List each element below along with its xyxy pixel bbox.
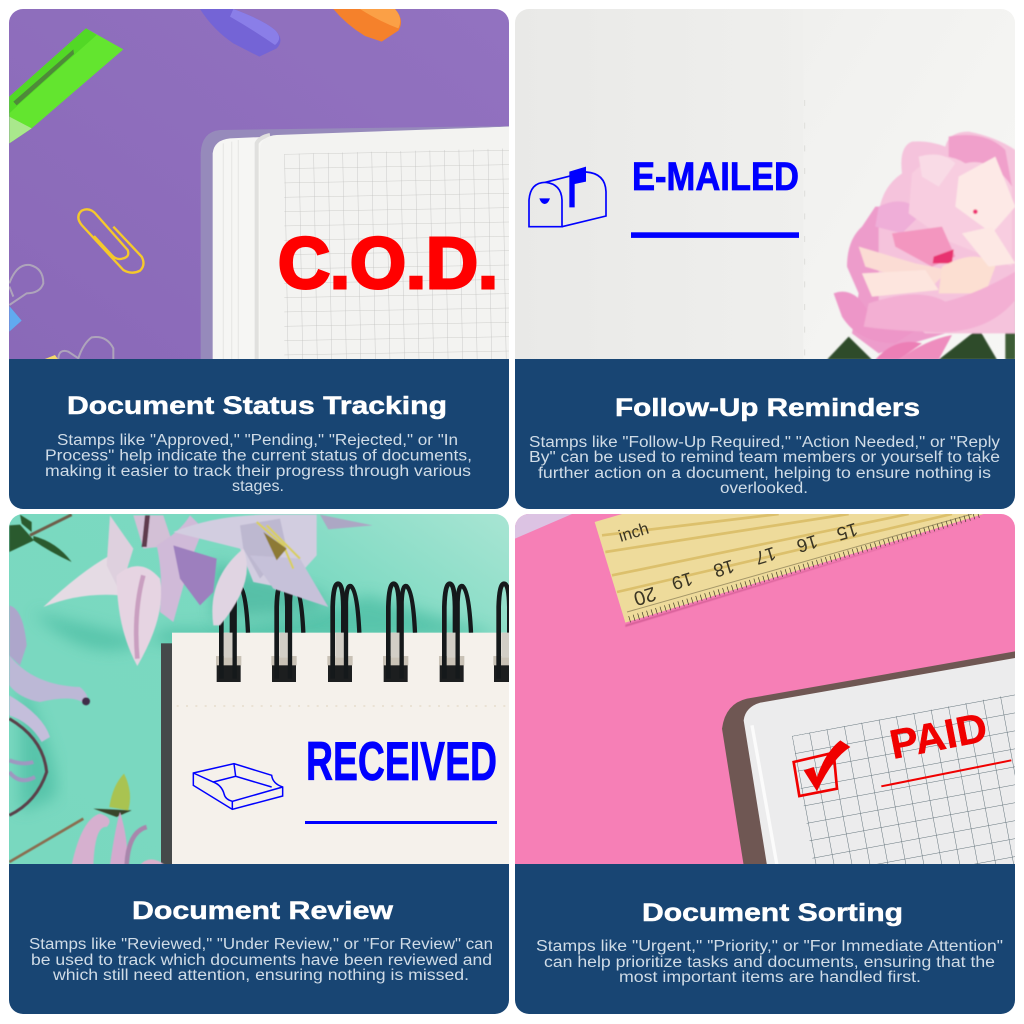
stamp text: C.O.D.: C.O.D. [278, 224, 498, 304]
icon: red check box [794, 740, 850, 796]
body text: Stamps like "Approved," "Pending," "Rejected," or "In [57, 432, 458, 449]
body text: Process" help indicate the current status of documents, [45, 448, 472, 464]
photo: white wall with peony [515, 9, 1017, 360]
body text: overlooked. [720, 480, 808, 497]
caption bar [515, 359, 1015, 509]
caption bar [9, 864, 509, 1014]
icon: yellow paperclip [78, 209, 143, 273]
stamp text: RECEIVED: RECEIVED [306, 730, 497, 792]
ruler: 16 [794, 531, 820, 557]
body text: can help prioritize tasks and documents, ensuring that the [544, 954, 995, 971]
panel: Document Review [9, 514, 525, 1014]
panel: Document Status Tracking [9, 9, 509, 509]
body text: Stamps like "Follow-Up Required," "Action Needed," or "Reply [529, 434, 1000, 451]
body text: Stamps like "Urgent," "Priority," or "For Immediate Attention" [536, 938, 1003, 955]
body text: stages. [232, 478, 284, 495]
ruler: 18 [711, 556, 737, 582]
body text: which still need attention, ensuring nothing is missed. [52, 967, 469, 984]
ruler: 17 [753, 543, 779, 569]
stamp underline [631, 232, 799, 238]
body text [529, 434, 1000, 497]
icon: orange pen clip [333, 9, 401, 42]
heading: Document Sorting [642, 899, 903, 927]
body text [29, 936, 493, 984]
heading: Follow-Up Reminders [615, 394, 920, 422]
caption bar [515, 864, 1015, 1014]
photo: purple desk with notebook [9, 9, 509, 360]
icon: mailbox [529, 167, 606, 227]
photo: teal desk with flowers and spiral notebook [9, 514, 525, 865]
body text: By" can be used to remind team members or yourself to take [529, 449, 1000, 466]
body text: Stamps like "Reviewed," "Under Review," or "For Review" can [29, 936, 493, 953]
panel: Document Sorting [515, 514, 1015, 1014]
peony flower [827, 132, 1015, 360]
ruler: inch [616, 519, 651, 546]
ruler [595, 514, 985, 627]
body text: most important items are handled first. [619, 969, 921, 986]
ruler: 20 [631, 582, 659, 609]
icon: binder clips [9, 265, 113, 360]
ruler: 15 [834, 519, 860, 545]
body text: further action on a document, helping to ensure nothing is [538, 465, 991, 482]
flowers [9, 515, 373, 865]
stamp text: PAID: PAID [886, 704, 991, 768]
photo: pink desk with ruler and notebook [515, 514, 1015, 865]
heading: Document Review [132, 897, 394, 925]
body text: making it easier to track their progress through various [45, 463, 471, 480]
ruler: 19 [669, 568, 695, 594]
icon: purple pen clip [200, 9, 280, 57]
notebook [722, 651, 1015, 865]
icon: green highlighter [9, 28, 123, 143]
body text [536, 938, 1003, 986]
stamp underline [305, 821, 497, 824]
body text [45, 432, 472, 495]
caption bar [9, 359, 509, 509]
notebook with spiral rings [161, 584, 525, 865]
stamp underline [881, 760, 1011, 786]
panel: Follow-Up Reminders [515, 9, 1017, 509]
stamp text: E-MAILED: E-MAILED [632, 155, 799, 199]
notebook [201, 126, 509, 360]
body text: be used to track which documents have been reviewed and [31, 952, 492, 969]
icon: document tray [193, 764, 283, 809]
heading: Document Status Tracking [67, 392, 447, 420]
